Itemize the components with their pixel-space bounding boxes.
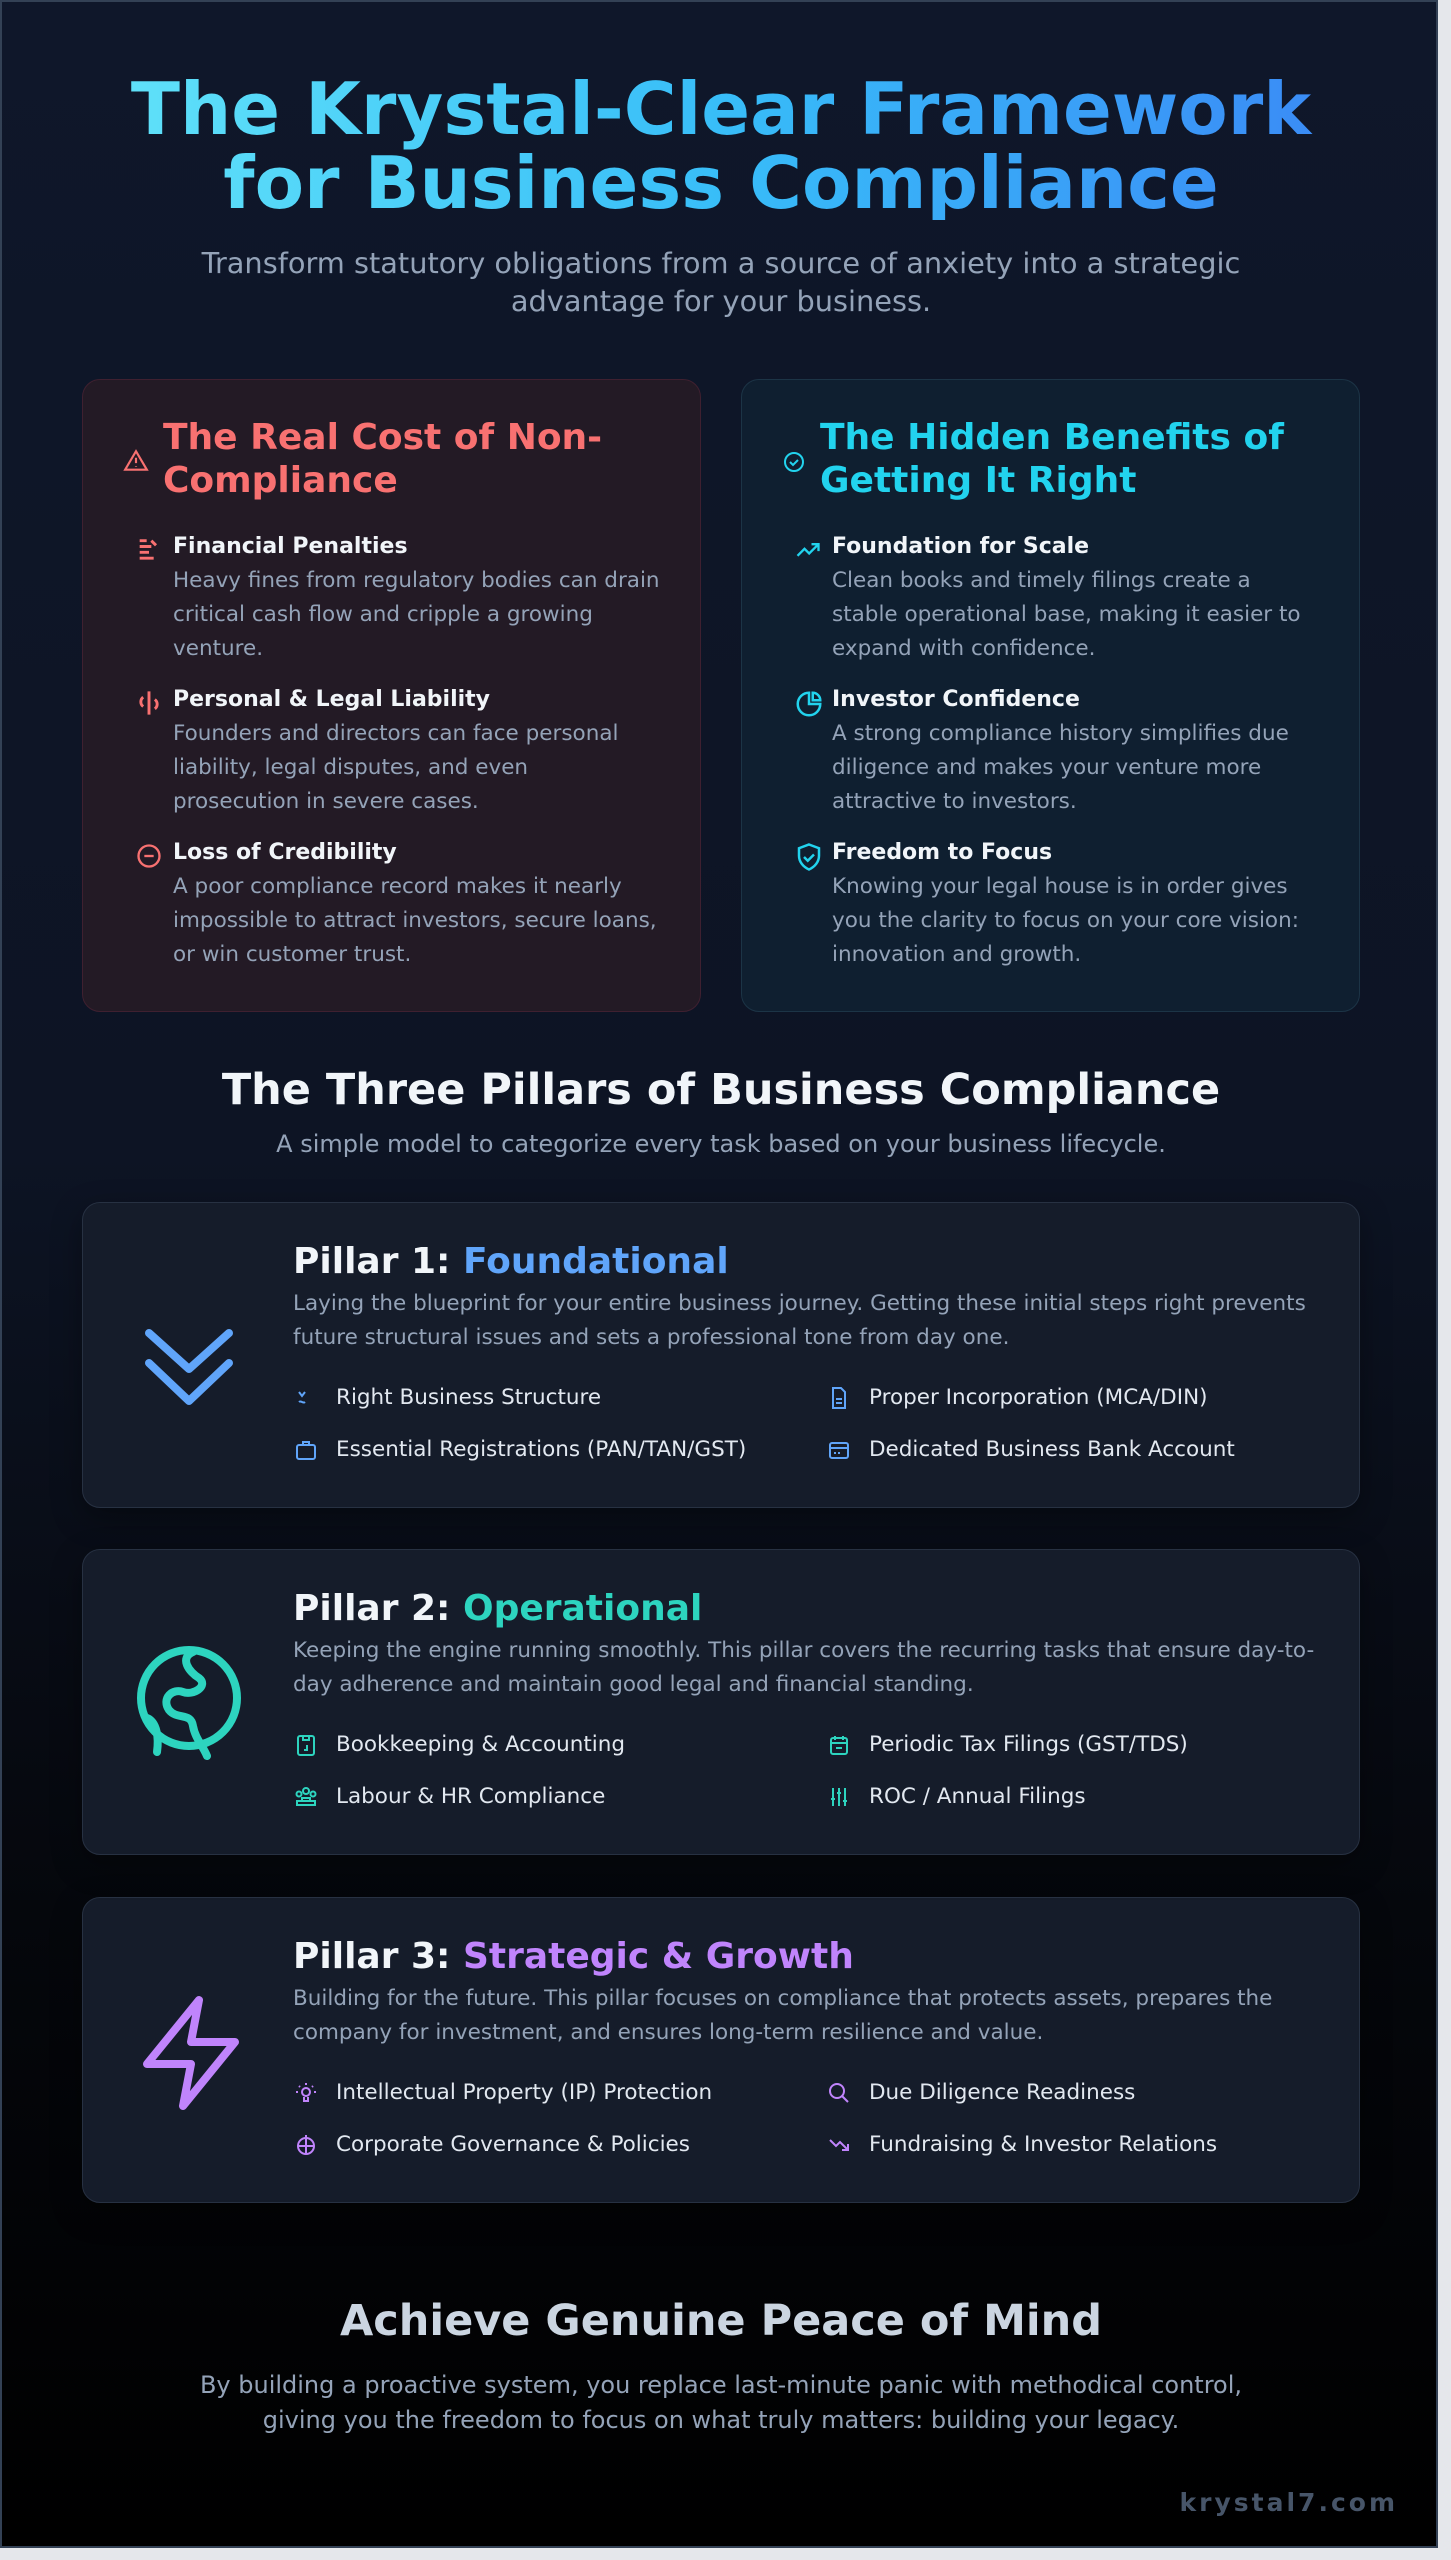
item: freedom	[798, 840, 1299, 967]
heading: benefits	[820, 417, 1284, 501]
item: credibility: A poor compliance record makes it nearly impossible to attract investors, secure loans, or win customer trust.	[173, 874, 657, 967]
pillar 2 title: Pillar 2: Operational	[293, 1588, 702, 1629]
subtitle: advantage for your business.	[511, 284, 931, 318]
list: pillar 2 items: Periodic Tax Filings (GST/TDS)	[869, 1732, 1188, 1757]
list: pillar 2 items	[296, 1732, 1188, 1809]
section heading: three pillars: The Three Pillars of Business Compliance	[222, 1065, 1220, 1115]
list: pillar 2 items: Labour & HR Compliance	[336, 1784, 605, 1809]
footer text: By building a proactive system, you replace last-minute panic with methodical control,	[200, 2371, 1242, 2399]
item: financial penalties: Heavy fines from regulatory bodies can drain critical cash flow and cripple a growing venture.	[173, 568, 660, 661]
item: financial penalties: Financial Penalties	[173, 534, 408, 559]
panel: pillar 1	[82, 1202, 1360, 1508]
heading: benefits: The Hidden Benefits of	[820, 417, 1284, 458]
panel: pillar 2	[82, 1549, 1360, 1855]
item: personal liability: Personal & Legal Liability	[173, 687, 490, 712]
footer text: giving you the freedom to focus on what truly matters: building your legacy.	[263, 2406, 1179, 2434]
item: personal liability: Founders and directors can face personal liability, legal disputes, and even	[173, 721, 618, 780]
subtitle: Transform statutory obligations from a source of anxiety into a strategic	[202, 246, 1240, 280]
pillar 2 description: Keeping the engine running smoothly. This pillar covers the recurring tasks that ensure day-to-day adherence and maintain good legal and financial standing.	[293, 1638, 1314, 1697]
item: freedom: Freedom to Focus	[832, 840, 1052, 865]
item: scale: Clean books and timely filings create a stable operational base, making it easier to expand with confidence.	[832, 568, 1301, 661]
list: pillar 1 items: Proper Incorporation (MCA/DIN)	[869, 1385, 1208, 1410]
subtitle	[202, 246, 1240, 318]
list: pillar 1 items	[296, 1385, 1235, 1462]
title	[2, 72, 1440, 220]
item: investor confidence: Investor Confidence	[832, 687, 1080, 712]
icon: warning	[123, 449, 149, 471]
item: personal liability: prosecution in severe cases.	[173, 789, 479, 814]
pillar 3 description: Building for the future. This pillar focuses on compliance that protects assets, prepares the company for investment, and ensures long-term resilience and value.	[293, 1986, 1272, 2045]
panel: pillar 3	[82, 1897, 1360, 2203]
list: pillar 1 items: Essential Registrations (PAN/TAN/GST)	[336, 1437, 746, 1462]
title: The Krystal-Clear Framework	[131, 67, 1311, 151]
list: pillar 1 items: Right Business Structure	[336, 1385, 601, 1410]
item: credibility: Loss of Credibility	[173, 840, 397, 865]
item: scale	[796, 534, 1301, 661]
list: pillar 3 items: Corporate Governance & Policies	[336, 2132, 690, 2157]
icon: double chevron	[145, 1329, 233, 1405]
pillar 1 title: Pillar 1: Foundational	[293, 1241, 729, 1282]
item: personal liability	[139, 687, 618, 814]
list: pillar 3 items: Intellectual Property (IP) Protection	[336, 2080, 712, 2105]
list: pillar 1 items: Dedicated Business Bank Account	[869, 1437, 1235, 1462]
item: investor confidence: A strong compliance history simplifies due diligence and makes your venture more attractive to investors.	[832, 721, 1289, 814]
item: investor confidence	[796, 687, 1289, 814]
heading: real cost: Compliance	[163, 460, 398, 501]
pillar 3 title: Pillar 3: Strategic & Growth	[293, 1936, 854, 1977]
panel: hidden benefits	[741, 379, 1360, 1012]
pillar 1 description: Laying the blueprint for your entire business journey. Getting these initial steps right prevents future structural issues and sets a professional tone from day one.	[293, 1291, 1306, 1350]
title: for Business Compliance	[223, 141, 1219, 225]
list: pillar 3 items: Due Diligence Readiness	[869, 2080, 1135, 2105]
item: freedom: Knowing your legal house is in order gives you the clarity to focus on your core vision: innovation and growth.	[832, 874, 1299, 967]
list: pillar 2 items: ROC / Annual Filings	[869, 1784, 1086, 1809]
item: credibility	[137, 840, 657, 967]
item: financial penalties	[140, 534, 660, 661]
heading: real cost: The Real Cost of Non-	[163, 417, 602, 458]
icon: lightning	[143, 1996, 239, 2110]
list: pillar 2 items: Bookkeeping & Accounting	[336, 1732, 625, 1757]
icon: check circle	[784, 452, 804, 472]
heading: real cost	[163, 417, 602, 501]
footer text	[200, 2371, 1242, 2434]
list: pillar 3 items: Fundraising & Investor Relations	[869, 2132, 1217, 2157]
icon: globe	[137, 1646, 241, 1760]
brand: krystal7.com	[1180, 2488, 1398, 2517]
panel: cost of non-compliance	[82, 379, 701, 1012]
footer heading: Achieve Genuine Peace of Mind	[340, 2296, 1102, 2346]
list: pillar 3 items	[296, 2080, 1217, 2157]
item: scale: Foundation for Scale	[832, 534, 1089, 559]
section subtitle: A simple model to categorize every task based on your business lifecycle.	[276, 1130, 1166, 1158]
heading: benefits: Getting It Right	[820, 460, 1136, 501]
